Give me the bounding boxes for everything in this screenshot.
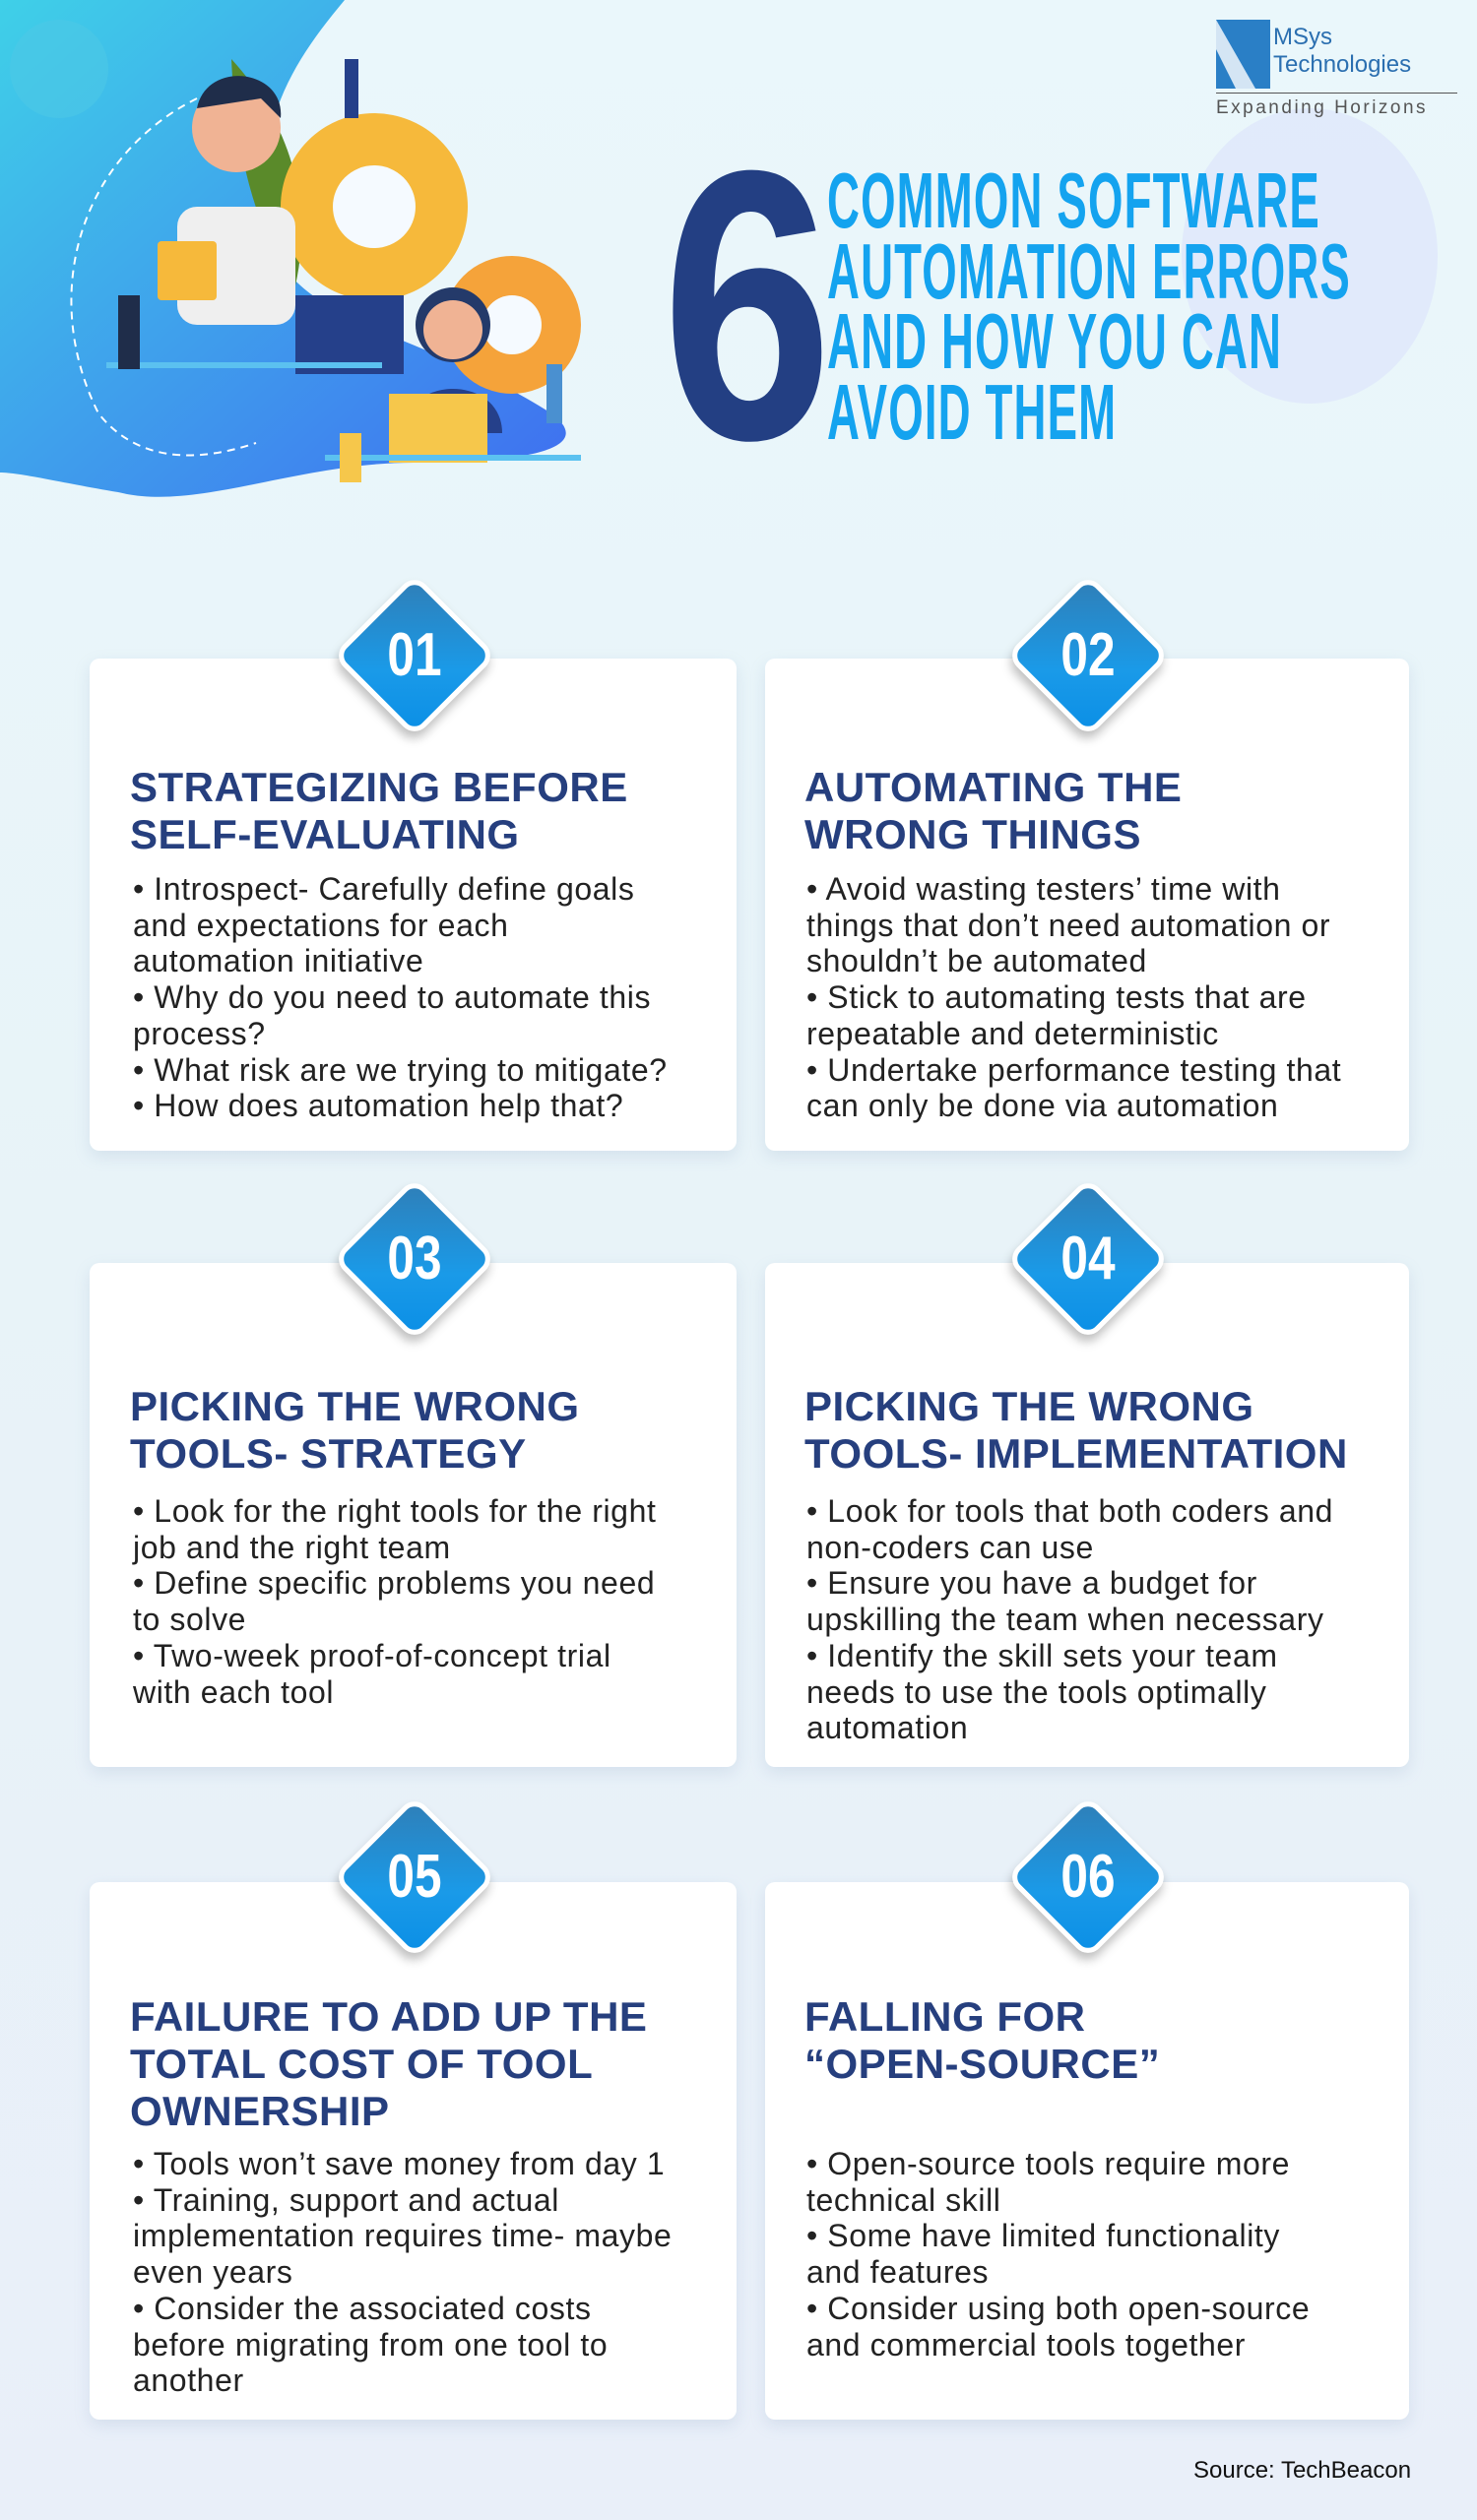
card 06 bbox=[765, 1882, 1409, 2420]
body 05 bbox=[133, 2146, 672, 2398]
body 01: • How does automation help that? bbox=[133, 1088, 623, 1123]
badge 03: 03 bbox=[387, 1225, 442, 1292]
body 06: technical skill bbox=[806, 2182, 1001, 2218]
source note: Source: TechBeacon bbox=[1193, 2457, 1411, 2484]
badge 02 bbox=[1006, 580, 1167, 742]
body 03 bbox=[132, 1493, 656, 1710]
body 03: to solve bbox=[133, 1602, 246, 1637]
body 02: • Undertake performance testing that bbox=[806, 1052, 1341, 1088]
body 03: • Define specific problems you need bbox=[133, 1565, 655, 1601]
heading 01: STRATEGIZING BEFORE bbox=[130, 764, 628, 810]
title: COMMON SOFTWARE bbox=[827, 157, 1320, 244]
badge 04: 04 bbox=[1060, 1225, 1116, 1292]
card 04 bbox=[765, 1263, 1409, 1767]
body 05: • Consider the associated costs bbox=[133, 2291, 592, 2326]
badge 01: 01 bbox=[387, 621, 442, 689]
heading 02 bbox=[804, 764, 1182, 857]
body 03: • Look for the right tools for the right bbox=[133, 1493, 656, 1529]
heading 04: PICKING THE WRONG bbox=[804, 1383, 1254, 1429]
body 06: • Open-source tools require more bbox=[806, 2146, 1290, 2181]
body 06: and commercial tools together bbox=[806, 2327, 1246, 2362]
body 05: • Tools won’t save money from day 1 bbox=[133, 2146, 665, 2181]
body 04: • Identify the skill sets your team bbox=[806, 1638, 1278, 1673]
badge 04 bbox=[1006, 1183, 1167, 1347]
body 03: • Two-week proof-of-concept trial bbox=[133, 1638, 611, 1673]
logo: MSys bbox=[1273, 24, 1332, 50]
body 01 bbox=[133, 871, 668, 1123]
body 01: process? bbox=[133, 1016, 266, 1051]
logo bbox=[1216, 20, 1457, 118]
heading 02: AUTOMATING THE bbox=[804, 764, 1182, 810]
body 05: • Training, support and actual bbox=[133, 2182, 559, 2218]
body 02: can only be done via automation bbox=[806, 1088, 1278, 1123]
logo: Technologies bbox=[1273, 51, 1411, 78]
body 01: automation initiative bbox=[133, 943, 423, 978]
body 04: • Look for tools that both coders and bbox=[806, 1493, 1333, 1529]
body 06 bbox=[806, 2146, 1310, 2362]
badge 01 bbox=[333, 580, 493, 742]
badge 05 bbox=[333, 1801, 493, 1965]
badge 06: 06 bbox=[1060, 1843, 1116, 1911]
body 02: things that don’t need automation or bbox=[806, 908, 1330, 943]
body 06: • Consider using both open-source bbox=[806, 2291, 1310, 2326]
card 05 bbox=[90, 1882, 737, 2420]
card 03 bbox=[90, 1263, 737, 1767]
body 02: • Stick to automating tests that are bbox=[806, 979, 1307, 1015]
body 04: needs to use the tools optimally bbox=[806, 1674, 1266, 1710]
heading 03: TOOLS- STRATEGY bbox=[130, 1430, 527, 1477]
body 01: • Why do you need to automate this bbox=[133, 979, 651, 1015]
heading 02: WRONG THINGS bbox=[804, 811, 1141, 857]
body 01: and expectations for each bbox=[133, 908, 508, 943]
body 04: • Ensure you have a budget for bbox=[806, 1565, 1257, 1601]
title: AVOID THEM bbox=[827, 368, 1117, 455]
heading 01 bbox=[130, 764, 628, 857]
badge 05: 05 bbox=[387, 1843, 442, 1911]
title: AUTOMATION ERRORS bbox=[827, 226, 1351, 315]
logo: Expanding Horizons bbox=[1216, 97, 1428, 118]
body 01: • What risk are we trying to mitigate? bbox=[133, 1052, 668, 1088]
heading 04: TOOLS- IMPLEMENTATION bbox=[804, 1430, 1348, 1477]
heading 04 bbox=[804, 1383, 1348, 1477]
body 04 bbox=[806, 1493, 1333, 1745]
heading 03: PICKING THE WRONG bbox=[130, 1383, 579, 1429]
body 06: and features bbox=[806, 2254, 989, 2290]
decorative circle right bbox=[1182, 108, 1438, 404]
body 04: automation bbox=[806, 1710, 968, 1745]
title: AND HOW YOU CAN bbox=[827, 297, 1282, 385]
body 03: job and the right team bbox=[133, 1530, 451, 1565]
card 02 bbox=[765, 659, 1409, 1151]
body 02: repeatable and deterministic bbox=[806, 1016, 1219, 1051]
body 04: non-coders can use bbox=[806, 1530, 1094, 1565]
body 02: • Avoid wasting testers’ time with bbox=[806, 871, 1281, 907]
body 03: with each tool bbox=[133, 1674, 334, 1710]
body 04: upskilling the team when necessary bbox=[806, 1602, 1324, 1637]
heading 05: OWNERSHIP bbox=[130, 2088, 390, 2134]
body 05: before migrating from one tool to bbox=[133, 2327, 608, 2362]
body 05: implementation requires time- maybe bbox=[133, 2218, 672, 2253]
heading 05 bbox=[130, 1993, 647, 2134]
big number 6: 6 bbox=[662, 91, 833, 520]
body 01: • Introspect- Carefully define goals bbox=[133, 871, 634, 907]
body 02: shouldn’t be automated bbox=[806, 943, 1147, 978]
body 02 bbox=[806, 871, 1341, 1123]
badge 03 bbox=[333, 1183, 493, 1347]
title bbox=[827, 157, 1351, 455]
body 05: even years bbox=[133, 2254, 293, 2290]
badge 06 bbox=[1006, 1801, 1167, 1965]
card 01 bbox=[90, 659, 737, 1151]
heading 06: “OPEN-SOURCE” bbox=[804, 2041, 1160, 2087]
body 05: another bbox=[133, 2362, 244, 2398]
heading 05: TOTAL COST OF TOOL bbox=[130, 2041, 593, 2087]
header illustration bbox=[0, 0, 581, 497]
heading 01: SELF-EVALUATING bbox=[130, 811, 520, 857]
badge 02: 02 bbox=[1060, 621, 1116, 689]
body 06: • Some have limited functionality bbox=[806, 2218, 1280, 2253]
heading 06: FALLING FOR bbox=[804, 1993, 1085, 2040]
heading 06 bbox=[804, 1993, 1160, 2087]
heading 03 bbox=[130, 1383, 579, 1477]
heading 05: FAILURE TO ADD UP THE bbox=[130, 1993, 647, 2040]
